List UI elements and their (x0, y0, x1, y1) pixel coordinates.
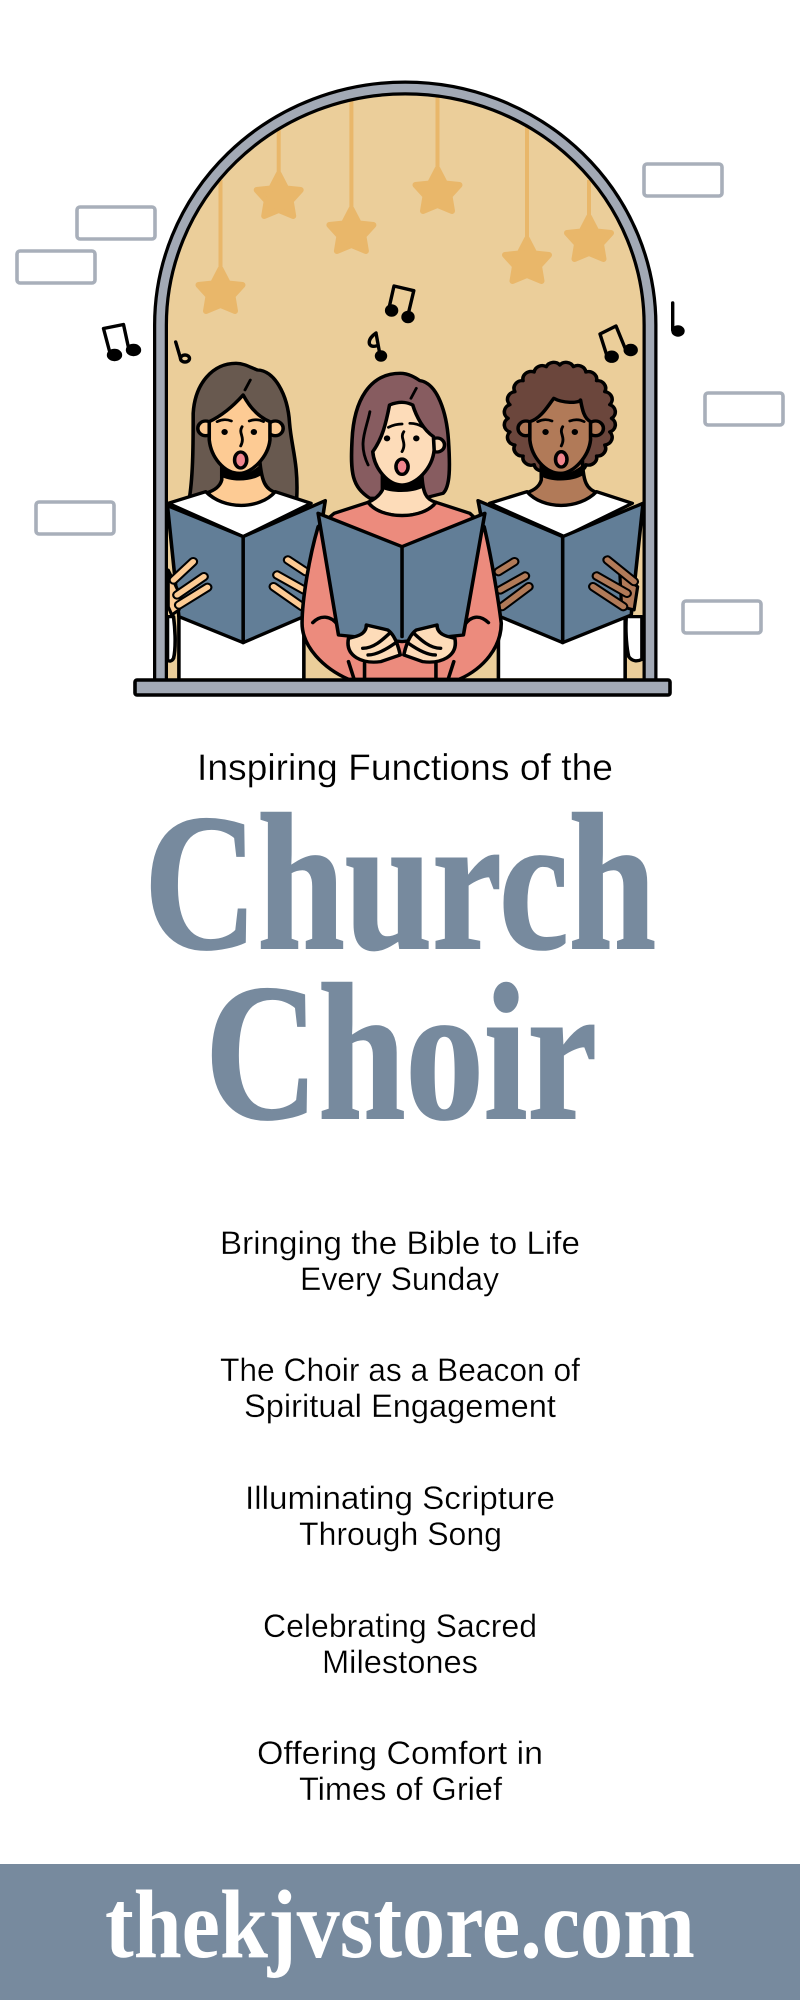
item 1 (220, 1225, 580, 1297)
item 4: Celebrating Sacred (263, 1608, 537, 1644)
item 1: Bringing the Bible to Life (220, 1225, 580, 1261)
item 4 (263, 1608, 537, 1680)
title: Church Choir: Church (144, 775, 656, 991)
item 2: Spiritual Engagement (244, 1388, 556, 1424)
item 2 (220, 1352, 580, 1424)
item 5 (257, 1735, 543, 1807)
illustration: choir in arched window (17, 88, 783, 695)
item 5: Offering Comfort in (257, 1735, 543, 1771)
window sill (135, 680, 670, 695)
item 3: Illuminating Scripture (245, 1480, 555, 1516)
item 5: Times of Grief (299, 1771, 502, 1807)
title: Church Choir (144, 775, 656, 1161)
footer website text: thekjvstore.com (105, 1871, 695, 1978)
list of functions (220, 1225, 580, 1807)
music notes (104, 286, 683, 362)
arched window background (160, 88, 650, 682)
singers (167, 362, 643, 679)
item 4: Milestones (322, 1644, 478, 1680)
footer banner (0, 1864, 800, 2000)
singer: left (167, 363, 325, 678)
item 1: Every Sunday (300, 1261, 499, 1297)
item 3 (245, 1480, 555, 1552)
right singer hands (498, 560, 638, 610)
singer: center (302, 373, 501, 679)
left singer hands (168, 560, 306, 615)
item 2: The Choir as a Beacon of (220, 1352, 580, 1388)
subtitle: Inspiring Functions of the (197, 747, 613, 788)
center singer hands (348, 625, 455, 662)
title: Church Choir: Choir (205, 945, 597, 1161)
hanging stars (198, 95, 611, 311)
wall bricks (17, 164, 783, 633)
window frame (160, 88, 650, 682)
item 3: Through Song (299, 1516, 502, 1552)
singer: right (478, 362, 643, 678)
